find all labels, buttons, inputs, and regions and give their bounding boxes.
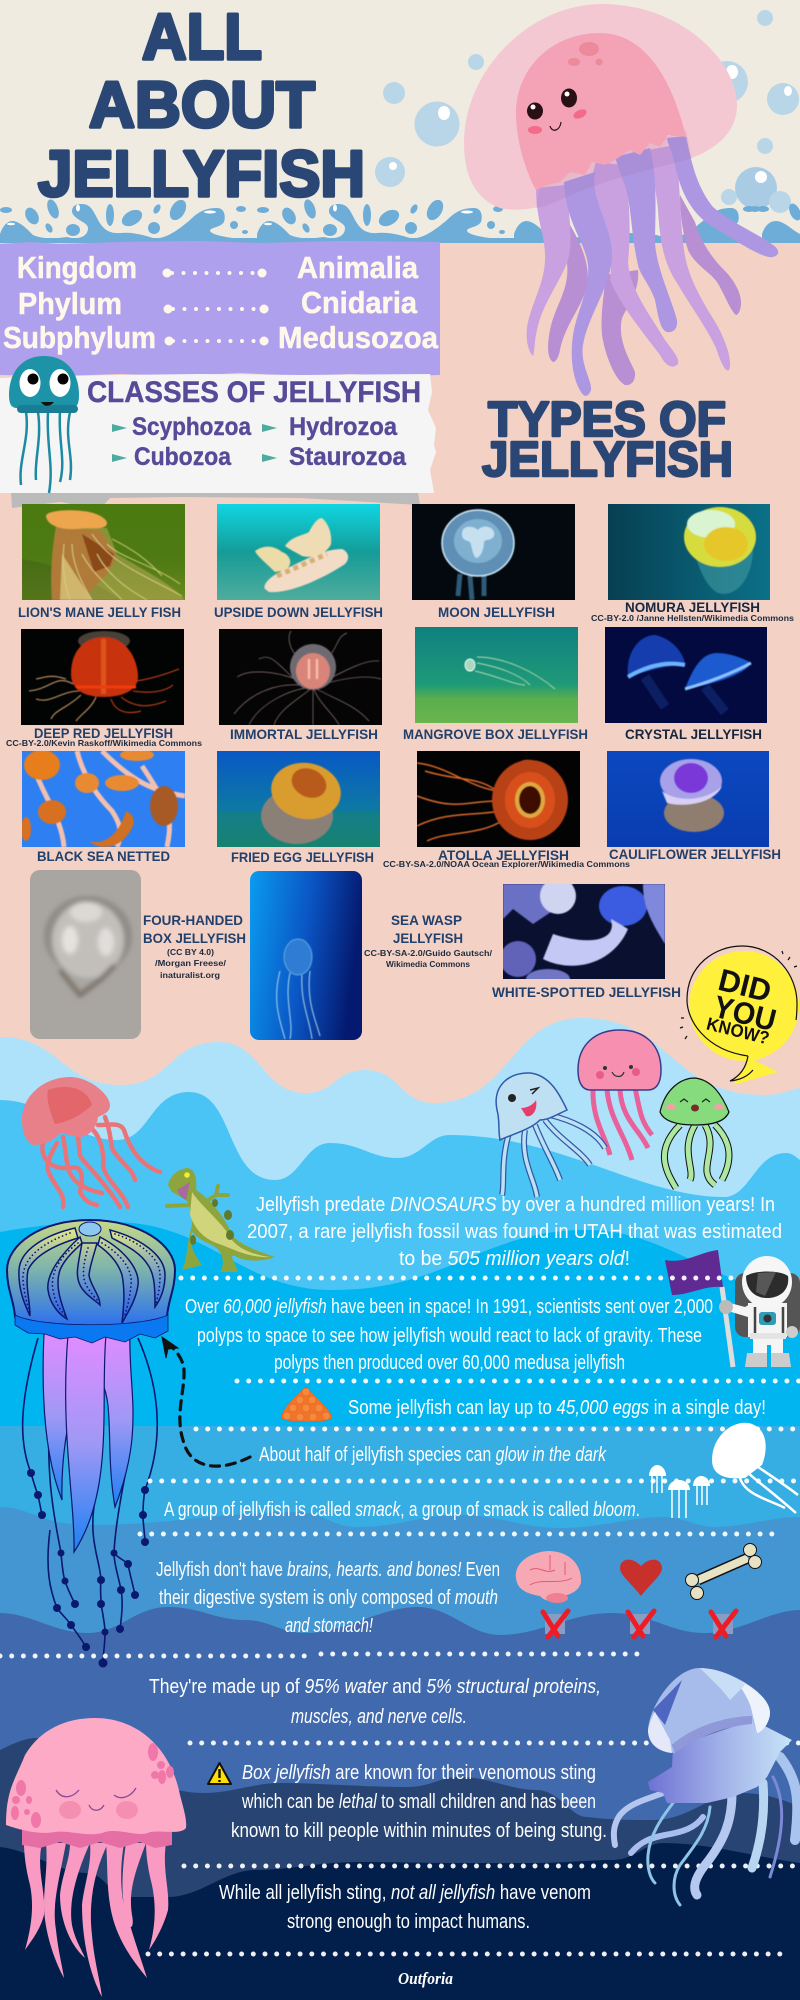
callout: did you know: KNOW? [705,1014,771,1048]
bell arms [19,1228,165,1323]
text: box jellyfish fact [231,1762,607,1842]
photo: cauliflower [607,751,769,847]
class list: Scyphozoa [132,413,252,441]
photo captions: CC-BY-2.0 /Janne Hellsten/Wikimedia Commons [591,613,794,623]
panel shadow [11,492,420,509]
water splash band [0,197,800,243]
lobes [43,1333,133,1552]
photo captions: CRYSTAL JELLYFISH [625,726,762,742]
text: water fact: They're made up of 95% water and 5% structural proteins, [149,1676,601,1698]
photo captions: DEEP RED JELLYFISH [34,725,173,741]
taxonomy labels: Phylum [18,286,122,321]
text: space fact: polyps then produced over 60,000 medusa jellyfish [274,1352,625,1374]
title [38,0,365,210]
icon: flag and astronaut [665,1250,800,1367]
panel: taxonomy [0,241,440,376]
text: dinosaurs fact: to be 505 million years old! [399,1248,630,1270]
class list [112,413,407,471]
taxonomy labels: Medusozoa [278,320,439,355]
photo captions: (CC BY 4.0) [167,947,214,957]
photo: atolla [417,751,580,847]
photo captions: UPSIDE DOWN JELLYFISH [214,604,383,620]
photo captions: MANGROVE BOX JELLYFISH [403,726,588,742]
flag [665,1250,733,1367]
photo: immortal [219,629,382,725]
icon: coral red jellyfish [22,1077,160,1207]
photo: nomura [608,504,770,600]
text: box jellyfish fact: which can be lethal to small children and has been [241,1791,596,1813]
photo captions: FOUR-HANDED [143,912,243,928]
callout: did you know [680,946,799,1085]
bubbles [375,10,799,213]
fringe [15,1315,168,1343]
green jellyfish [660,1078,729,1188]
text: venom fact: strong enough to impact humans. [287,1911,530,1933]
heading: types of jellyfish [482,393,733,487]
taxonomy labels: Kingdom [17,250,137,285]
photo captions: /Morgan Freese/ [155,958,227,968]
photo captions: BLACK SEA NETTED [37,848,170,864]
photo: fried egg [217,751,380,847]
icons: brain heart bone [516,1544,762,1637]
title: JELLYFISH [38,137,365,210]
photo: sea wasp [250,871,362,1040]
photo: moon [412,504,575,600]
bell [648,1668,770,1753]
text: no brains fact: and stomach! [285,1615,373,1637]
photo captions: JELLYFISH [393,930,463,946]
icon: heart [620,1560,662,1596]
icon: jellyfish trio [496,1030,729,1197]
class list: Cubozoa [134,443,232,471]
text: water fact: muscles, and nerve cells. [291,1706,467,1728]
icon: lavender jellyfish [614,1668,797,1905]
photo captions: SEA WASP [391,912,462,928]
photo captions: ATOLLA JELLYFISH [438,847,569,863]
photo: four-handed box [30,870,141,1039]
text: dinosaurs fact: Jellyfish predate DINOSAURS by over a hundred million years! In [256,1194,775,1216]
ocean background waves [0,1018,800,2000]
icon: big blue jellyfish [7,1220,175,1668]
callout: did you know: DID [715,962,775,1009]
text: no brains fact: Jellyfish don't have brains, hearts. and bones! Even [156,1559,500,1581]
text: water fact [149,1676,601,1728]
arm dots [23,1233,160,1318]
astronaut [719,1256,800,1367]
heading: types of jellyfish: TYPES OF [488,393,726,447]
bell [7,1220,175,1327]
photo captions: Wikimedia Commons [386,959,470,969]
photo captions: NOMURA JELLYFISH [625,599,760,615]
photo: lion's mane [22,504,185,600]
icon: pink sleeping jellyfish [6,1718,186,1997]
taxonomy labels: Subphylum [3,320,156,355]
dots [27,1469,149,1668]
photo: black sea netted [22,751,185,847]
class list: Staurozoa [289,443,407,471]
strands [23,1338,157,1663]
photo captions: FRIED EGG JELLYFISH [231,849,374,865]
photo captions: IMMORTAL JELLYFISH [230,726,378,742]
icon: white jellyfish group [649,1423,798,1518]
icon: brain [516,1551,581,1603]
tentacles [614,1757,797,1905]
photo: crystal [605,627,767,723]
photo captions: BOX JELLYFISH [143,930,246,946]
text: no brains fact [156,1559,500,1637]
text: box jellyfish fact: Box jellyfish are known for their venomous sting [242,1762,596,1784]
photo: upside down [217,504,380,600]
callout: did you know: YOU [710,989,780,1038]
title: ABOUT [89,68,315,141]
text: smack fact: A group of jellyfish is called smack, a group of smack is called bloom. [164,1499,640,1521]
text: venom fact [219,1882,591,1933]
photo: deep red [21,629,184,725]
class list: Hydrozoa [289,413,398,441]
text: box jellyfish fact: known to kill people within minutes of being stung. [231,1820,607,1842]
icon: warning sign [208,1763,231,1784]
photo captions: CC-BY-SA-2.0/Guido Gautsch/ [364,948,493,958]
logo: Outforia: Outforia [398,1969,453,1988]
text: dinosaurs fact [247,1194,782,1270]
photo captions: LION'S MANE JELLY FISH [18,604,181,620]
icon: bone [686,1544,762,1600]
icon: dinosaur [167,1168,275,1272]
photo captions: CAULIFLOWER JELLYFISH [609,846,781,862]
text: venom fact: While all jellyfish sting, not all jellyfish have venom [219,1882,591,1904]
photo captions: MOON JELLYFISH [438,604,555,620]
pink jellyfish [578,1030,661,1160]
inner bell and face [516,33,686,190]
photo: mangrove box [415,627,578,723]
text: eggs fact: Some jellyfish can lay up to 45,000 eggs in a single day! [348,1397,766,1419]
heading: types of jellyfish: JELLYFISH [482,433,733,487]
arrow: dashed pointer [162,1337,250,1466]
taxonomy labels: Animalia [297,250,419,285]
panel: classes of jellyfish [0,356,436,509]
dotted dividers [0,1278,800,1954]
photo grid [21,504,770,1040]
light blue jellyfish [496,1073,605,1197]
text: space fact [185,1296,713,1374]
taxonomy labels: Cnidaria [301,285,418,320]
icon: teal cartoon jellyfish [9,356,79,493]
outer bell [464,4,737,210]
photo captions: CC-BY-SA-2.0/NOAA Ocean Explorer/Wikimedia Commons [383,859,630,869]
text: glow fact: About half of jellyfish species can glow in the dark [259,1444,607,1466]
body [648,1720,792,1803]
panel: classes of jellyfish: CLASSES OF JELLYFISH [87,376,421,409]
photo: white-spotted [503,884,665,979]
photo captions: inaturalist.org [160,970,220,980]
text: no brains fact: their digestive system is only composed of mouth [159,1587,498,1609]
icon: egg pile [281,1387,332,1422]
photo captions [6,599,794,1000]
big pink jellyfish [464,4,778,396]
dotted connectors [167,273,264,341]
icon: red crosses [543,1611,736,1637]
photo captions: WHITE-SPOTTED JELLYFISH [492,984,681,1000]
photo captions: CC-BY-2.0/Kevin Raskoff/Wikimedia Commons [6,738,202,748]
small jellyfish [649,1465,710,1518]
taxonomy labels [3,250,439,355]
tentacles [527,130,778,396]
title: ALL [142,0,262,73]
